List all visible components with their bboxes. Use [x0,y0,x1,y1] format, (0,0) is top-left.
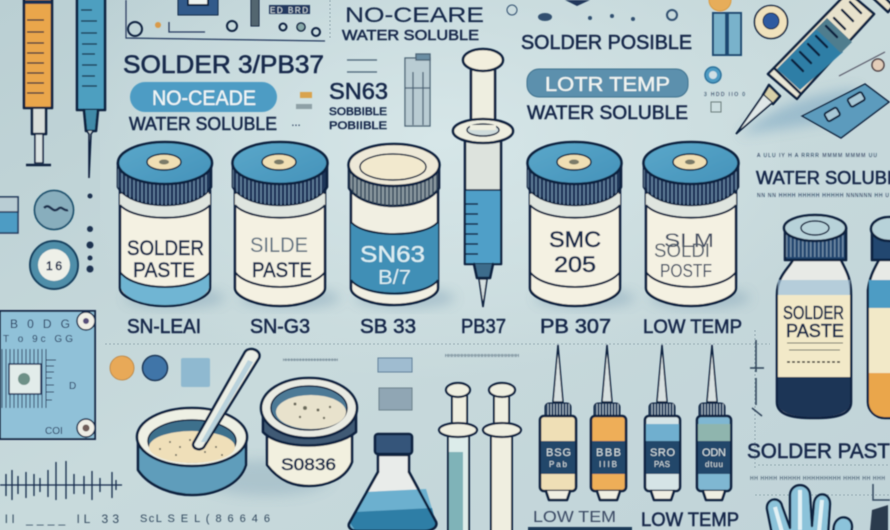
label: sb 33: SB 33 [360,316,416,338]
pill: low temp [527,69,688,97]
jar: solder paste 5: SOLDI [654,241,710,262]
bottle: solder paste right: SOLDER [783,303,844,323]
icon: bracket corner [873,484,890,500]
dropper bottle 4: dtuu [705,460,723,469]
label: low tem: LOW TEM [533,509,616,526]
heading: solder posible: SOLDER POSIBLE [521,32,692,54]
icon: orange coin top [709,0,731,11]
jar: solder paste 2: PASTE [252,259,312,282]
open jar: sb836: S0836 [281,455,336,474]
jar: sn63 b37 [348,144,440,305]
dropper bottle 4 [697,345,731,500]
jar: smc 205 [528,142,622,306]
syringe: diagonal top right [736,0,890,134]
icon: circuit strip [802,52,889,138]
dropper bottle 3: SRO [650,447,675,459]
shadow: diagonal syringe [740,88,860,135]
note lines right: NN NN HHHH HHHHH HHHHH NNNNNN HH U [757,193,889,199]
dropper bottle 3 [645,345,680,500]
pill: no-cleade [130,82,277,112]
bowl with spatula [137,349,259,495]
dropper bottle 1: BSG [546,447,571,459]
bottle: solder paste right: PASTE [786,321,844,341]
circuit board: bottom left [0,311,95,439]
icon: dark tool corner [870,505,888,530]
icon: small ring and notes [704,67,745,112]
icon: round badge [754,6,788,38]
jar: solder paste 5: POSTF [660,261,712,281]
heading: solder 3/pb37: SOLDER 3/PB37 [123,51,324,79]
small icons: center left [292,92,312,129]
jar: solder paste 1: SOLDER [127,237,204,260]
dropper bottle 1: Pab [549,460,568,469]
heading: solder past: SOLDER PAST [747,440,890,463]
label: pb 307: PB 307 [540,316,611,338]
circuit board: bottom left: T o 9c GG [3,334,73,345]
dropper bottle 3: PAS [654,460,670,469]
text: sn63 block [329,78,388,132]
syringe: blue top left [77,0,105,178]
note lines right [757,153,889,199]
syringe: small right [483,383,521,530]
jar: solder paste 2 [232,142,328,306]
jar: solder paste 1 [118,142,212,306]
icons: left column [0,190,94,289]
heading: water soluble right: WATER SOLUBI [756,168,890,188]
jar: solder paste 1: PASTE [133,259,195,282]
notes: small marks: HH HHHH HHHHH HHHHHHHHH HHHH HH HHH [750,476,885,482]
text: water soluble top: WATER SOLUBLE [342,27,479,44]
icon: small ring and notes: 3 HDD IIO 0 [704,92,745,98]
jar: smc 205: 205 [554,252,596,277]
icons: three small [110,356,210,387]
barcode: waveform [0,461,122,500]
circuit board: top [126,0,325,41]
icon: blue test strips [712,12,742,56]
heading: no-clean top: NO-CEARE [345,4,484,27]
dropper bottle 1 [540,345,576,500]
dark bar bottom [528,527,632,530]
circuit board: bottom left: D [69,381,76,392]
syringe: orange top left [24,0,52,165]
jar: sn63 b37: B/7 [378,267,411,289]
label: low temp: LOW TEMP [643,317,742,338]
open jar: sb836 [261,378,357,486]
small icons: center left: • • • [292,123,300,129]
icon: small device [347,54,430,126]
flask [349,434,436,530]
jar: solder paste 5 [644,142,738,306]
syringe: small left [439,383,477,530]
jar: solder paste 5: SLM [664,231,714,252]
jar shadows [125,288,750,308]
small icons: top center [507,0,677,21]
icon: glove [767,485,852,530]
text: water soluble left: WATER SOLUBLE [129,114,277,134]
bottle: second right partial [868,217,890,418]
text: sn63 block: POBIIBLE [329,120,387,132]
circuit board: bottom left: B 0 D G [10,317,70,331]
label: pb37: PB37 [461,316,506,338]
circuit board: top: ED BRD [270,6,308,15]
small blocks center: HHHHHHHHHHHHHHHHHHH [283,357,338,362]
label: sn-g3: SN-G3 [250,316,310,338]
pill: low temp: LOTR TEMP [545,74,670,96]
jar: solder paste 2: SILDE [250,234,308,257]
dropper bottle 4: ODN [702,447,726,459]
dropper bottle 2 [591,345,626,500]
syringe pair bottom [439,383,521,530]
pill: no-cleade: NO-CEADE [152,87,256,110]
icon: needle instrument [750,340,764,416]
text: water soluble center: WATER SOLUBLE [527,103,688,124]
syringe: center large [453,49,513,307]
circuit board: bottom left: COI [45,426,63,437]
text: sn63 block: SN63 [329,78,388,104]
icons: left column: 16 [46,259,62,273]
dropper bottle 2: IIIB [599,460,617,469]
jar shadow bottom [200,460,330,496]
bottom left noise text: ll ____ lL 33 [5,512,120,526]
text: sn63 block: SOBBIBLE [329,106,387,118]
note lines right: A ULU IY H A RRRR MMMM MMMM UU [757,153,877,159]
label: sn-leai: SN-LEAI [127,316,201,338]
small note center: HHHHHHHHHHHHHHHHHHHHHH [445,353,519,358]
bottle: solder paste right [777,215,851,418]
jar: smc 205: SMC [549,227,601,252]
jar: sn63 b37: SN63 [360,241,425,267]
bottom center noise text: ScL S E L ( 8 6 6 4 6 [140,513,270,525]
dropper bottle 2: BBB [596,447,621,459]
small blocks center [283,357,412,410]
